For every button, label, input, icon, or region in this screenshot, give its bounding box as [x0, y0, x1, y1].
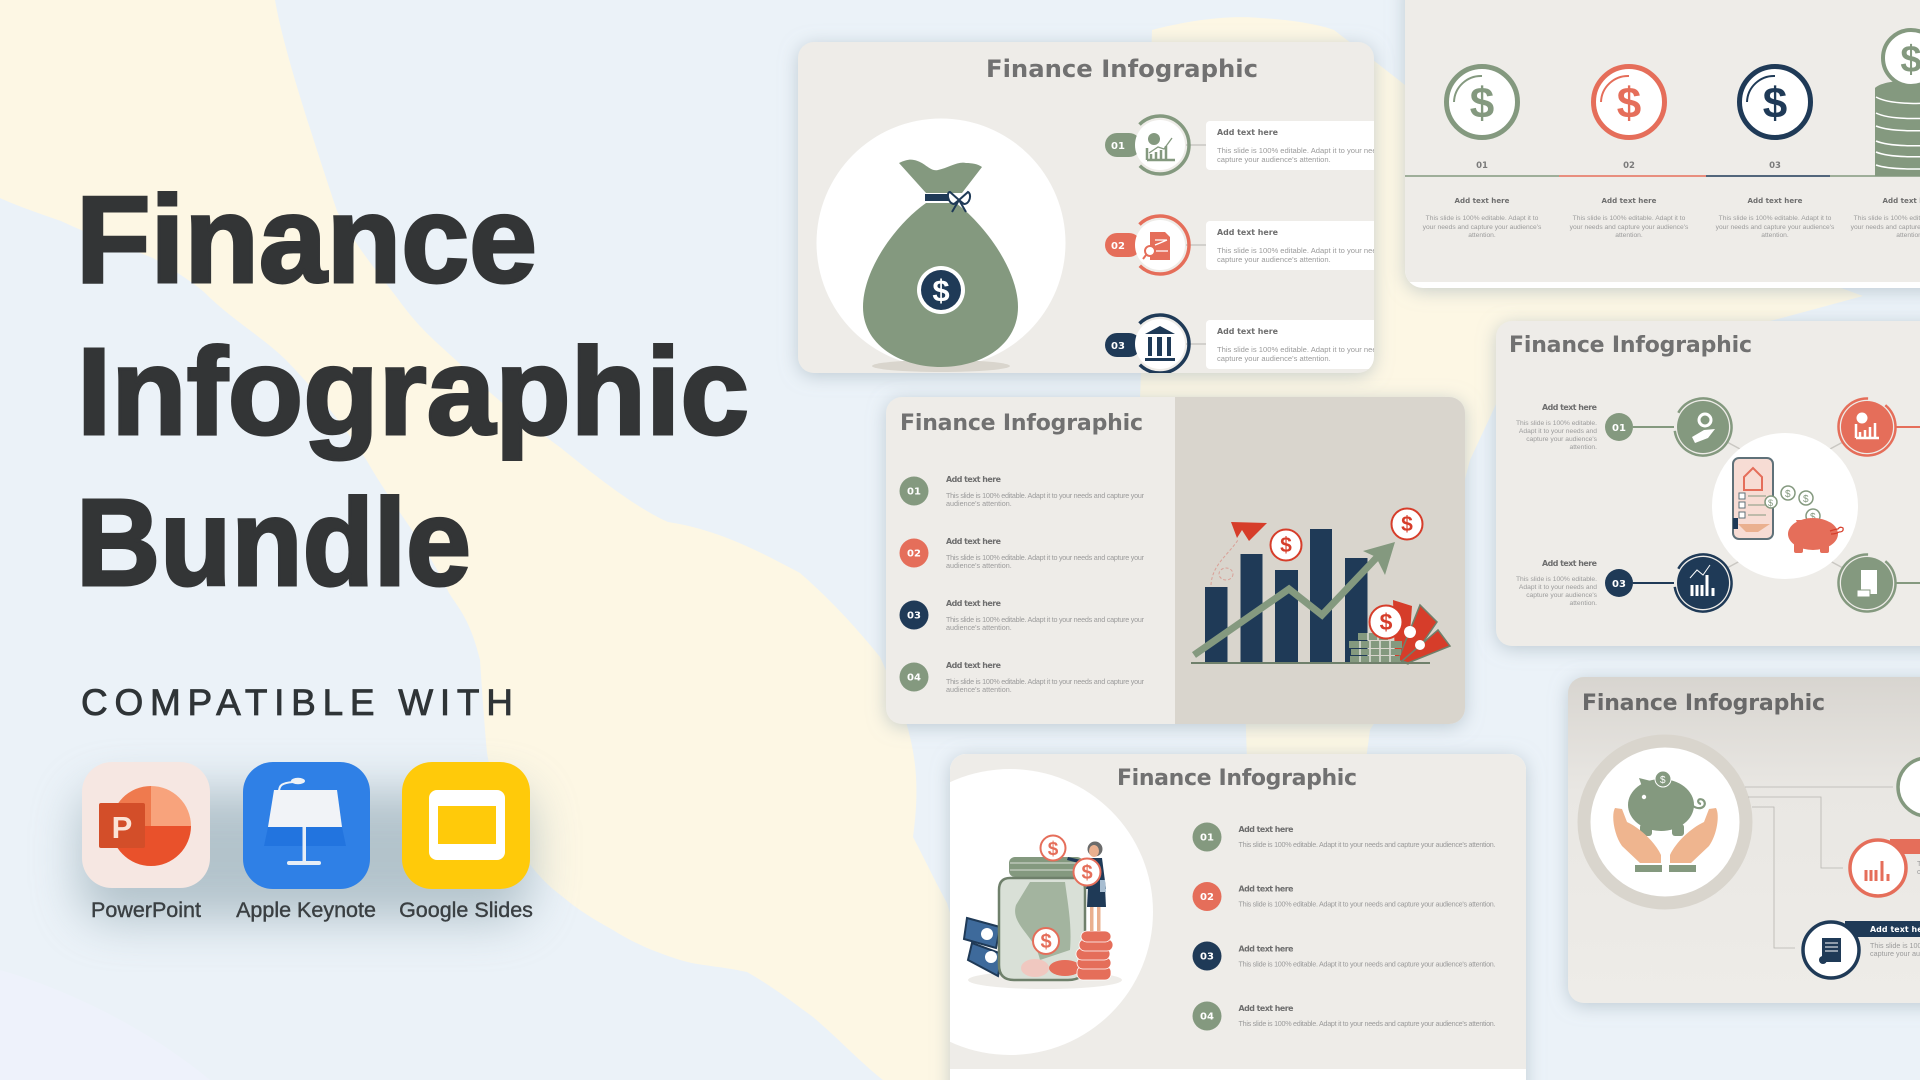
icon: money bag: $	[932, 273, 950, 308]
list item 4	[1192, 1002, 1496, 1030]
icon: piggy bank: $	[1660, 775, 1666, 786]
panel: slide money bag	[798, 42, 1399, 385]
list item 2: audience's attention.	[946, 561, 1012, 570]
title: Bundle	[76, 475, 471, 612]
icon: coin 1	[1270, 530, 1302, 560]
node 3	[1516, 544, 1742, 622]
coin stack	[1875, 30, 1920, 176]
icon: hands	[1613, 808, 1718, 872]
node top	[1898, 758, 1920, 816]
list item 2	[900, 537, 1145, 570]
list item 1	[900, 475, 1145, 508]
row 3	[1105, 313, 1374, 373]
node 3: This slide is 100% editable.	[1516, 576, 1597, 583]
node 1: Add text here	[1542, 403, 1597, 412]
bar chart	[1191, 529, 1430, 664]
list item 1: audience's attention.	[946, 499, 1012, 508]
node middle	[1850, 839, 1920, 896]
list item 1: This slide is 100% editable. Adapt it to your needs and capture your audience's attention.	[1238, 840, 1496, 849]
icon: Google Slides	[402, 762, 530, 889]
list item 2: 02	[907, 548, 921, 560]
node bottom	[1803, 921, 1920, 978]
arrow: growth	[1194, 542, 1395, 655]
icon: coin 2: $	[1401, 513, 1413, 536]
icon: coin 3: $	[1380, 609, 1393, 635]
list item 2: This slide is 100% editable. Adapt it to your needs and capture your	[946, 553, 1145, 562]
panel: slide hub diagram	[1496, 321, 1920, 646]
row 3: Add text here	[1217, 327, 1278, 336]
row 1: Add text here	[1217, 128, 1278, 137]
slide title: Finance Infographic	[1117, 766, 1357, 791]
icon: money bag	[863, 160, 1018, 367]
row 2: 02	[1111, 241, 1125, 252]
coin 1: 01	[1476, 161, 1488, 171]
coin 2: $	[1617, 79, 1641, 128]
panel: slide coins timeline	[1405, 0, 1920, 288]
column 3 text: This slide is 100% editable. Adapt it to	[1719, 215, 1832, 222]
column 1 text: your needs and capture your audience's	[1423, 224, 1542, 231]
label: PowerPoint: PowerPoint	[91, 898, 201, 922]
icon: piggy bank	[1628, 771, 1705, 836]
ring and circle	[1584, 741, 1746, 903]
row 1: This slide is 100% editable. Adapt it to your needs and	[1217, 146, 1399, 155]
row 1: 01	[1111, 141, 1125, 152]
illustration: piggy bank	[1788, 518, 1843, 553]
illustration: coin held: $	[1081, 862, 1093, 884]
column 3 text: your needs and capture your audience's	[1716, 224, 1835, 231]
list item 3: Add text here	[1238, 944, 1294, 953]
illustration: floating coins: $	[1803, 494, 1809, 505]
list item 2: Add text here	[1238, 885, 1294, 894]
slide title: Finance Infographic	[1582, 691, 1825, 716]
illustration: coin over jar	[1040, 836, 1066, 860]
list item 1: Add text here	[1238, 825, 1294, 834]
illustration: jar	[999, 857, 1085, 980]
list item 1: This slide is 100% editable. Adapt it to your needs and capture your	[946, 491, 1145, 500]
illustration: floating coins: $	[1810, 512, 1816, 523]
row 2: This slide is 100% editable. Adapt it to your needs and	[1217, 246, 1399, 255]
list item 3: 03	[1200, 952, 1214, 962]
list item 3	[1192, 942, 1496, 970]
row 1: capture your audience's attention.	[1217, 155, 1331, 164]
column 2 text: Add text here	[1602, 196, 1657, 205]
icon shadow	[80, 790, 530, 920]
icon: coin 1: $	[1280, 534, 1292, 557]
column 4 text	[1851, 196, 1920, 239]
slide title: Finance Infographic	[900, 411, 1143, 436]
title: Infographic	[77, 324, 749, 461]
connectors	[1745, 787, 1893, 948]
node 3: Adapt it to your needs and	[1519, 584, 1597, 591]
icon: PowerPoint: P	[112, 810, 132, 845]
column 2 text	[1570, 196, 1689, 239]
title: Finance	[76, 172, 537, 309]
node 1: 01	[1612, 423, 1626, 434]
bag shadow	[872, 360, 1010, 372]
list item 3: This slide is 100% editable. Adapt it to your needs and capture your audience's attention.	[1238, 959, 1496, 968]
panel: slide piggy hands	[1568, 677, 1920, 1003]
node 3: 03	[1612, 579, 1626, 590]
column 1 text: attention.	[1468, 232, 1496, 239]
list item 4: Add text here	[1238, 1004, 1294, 1013]
list item 1: 01	[907, 486, 921, 498]
coin 3	[1740, 66, 1810, 171]
node 1: attention.	[1569, 444, 1597, 451]
column 3 text	[1716, 196, 1835, 239]
coin 1: $	[1470, 79, 1494, 128]
icon: coin 3	[1370, 606, 1402, 638]
illustration: floating coins: $	[1785, 489, 1791, 500]
background: lavender corner	[0, 970, 210, 1080]
panel: slide savings jar	[867, 754, 1526, 1080]
column 3 text: attention.	[1761, 232, 1789, 239]
coin 2	[1594, 66, 1664, 171]
illustration: coin in jar	[1033, 928, 1059, 954]
white circle	[816, 118, 1066, 368]
column 3 text: Add text here	[1748, 196, 1803, 205]
icon: paper plane	[1211, 522, 1267, 585]
column 2 text: This slide is 100% editable. Adapt it to	[1573, 215, 1686, 222]
coin 2: 02	[1623, 161, 1635, 171]
background: yellow wave	[0, 0, 1000, 1080]
list item 1: Add text here	[946, 475, 1001, 484]
node 1: Adapt it to your needs and	[1519, 428, 1597, 435]
row 3: capture your audience's attention.	[1217, 354, 1331, 363]
node 3: Add text here	[1542, 559, 1597, 568]
column 2 text: attention.	[1615, 232, 1643, 239]
column 1 text	[1423, 196, 1542, 239]
coin 3: 03	[1769, 161, 1781, 171]
slide title: Finance Infographic	[986, 54, 1258, 83]
slide title: Finance Infographic	[1509, 333, 1752, 358]
illustration: coin held	[1074, 858, 1100, 886]
node 2	[1827, 387, 1920, 467]
illustration: coin over jar: $	[1048, 839, 1059, 860]
list item 4: audience's attention.	[946, 685, 1012, 694]
row 3: 03	[1111, 341, 1125, 352]
label: Apple Keynote: Apple Keynote	[236, 898, 376, 922]
list item 3: 03	[907, 610, 921, 622]
node 4	[1827, 543, 1920, 623]
list item 4: This slide is 100% editable. Adapt it to your needs and capture your	[946, 677, 1145, 686]
list item 1: 01	[1200, 832, 1214, 844]
column 1 text: Add text here	[1455, 196, 1510, 205]
icon: banknote stack	[1349, 633, 1402, 662]
illustration: jar shadow	[968, 974, 1122, 989]
list item 2: Add text here	[946, 537, 1001, 546]
list item 3: audience's attention.	[946, 623, 1012, 632]
list item 4: This slide is 100% editable. Adapt it to your needs and capture your audience's attention.	[1238, 1019, 1496, 1028]
title	[76, 172, 749, 612]
list item 1	[1192, 822, 1496, 852]
white circle	[950, 769, 1153, 1055]
row 1	[1105, 114, 1374, 176]
row 3: This slide is 100% editable. Adapt it to your needs and	[1217, 345, 1399, 354]
timeline line	[1405, 175, 1920, 177]
row 2: Add text here	[1217, 228, 1278, 237]
illustration: coin stack	[1076, 931, 1113, 980]
list item 4	[900, 661, 1145, 694]
list item 2: 02	[1200, 892, 1214, 903]
list item 2: This slide is 100% editable. Adapt it to your needs and capture your audience's attention.	[1238, 900, 1496, 909]
node 3: attention.	[1569, 600, 1597, 607]
row 2	[1105, 214, 1374, 276]
node 1: capture your audience's	[1526, 436, 1598, 443]
label: Google Slides: Google Slides	[399, 898, 533, 922]
illustration: floating coins	[1765, 486, 1820, 523]
column 1 text: This slide is 100% editable. Adapt it to	[1426, 215, 1539, 222]
icon: coin 2	[1392, 508, 1422, 540]
icon: PowerPoint	[82, 762, 210, 888]
center circle	[1712, 433, 1858, 579]
illustration: floating coins: $	[1768, 498, 1773, 508]
background: yellow blob right	[1140, 17, 1863, 760]
coin 1	[1446, 66, 1518, 171]
list item 3: This slide is 100% editable. Adapt it to your needs and capture your	[946, 615, 1145, 624]
illustration: banknotes	[964, 918, 1002, 976]
node 3: capture your audience's	[1526, 592, 1598, 599]
illustration: phone	[1733, 458, 1773, 539]
icon: Apple Keynote	[243, 762, 370, 889]
list item 4: Add text here	[946, 661, 1001, 670]
connectors	[1727, 442, 1843, 568]
list item 4: 04	[907, 672, 921, 684]
panel: slide growth chart	[886, 397, 1465, 724]
list item 4: 04	[1200, 1012, 1214, 1022]
coin 3: $	[1763, 79, 1787, 128]
icon: cash fan	[1393, 600, 1450, 664]
heading: compatible with: COMPATIBLE WITH	[81, 682, 513, 723]
list item 3	[900, 599, 1145, 632]
node 1: This slide is 100% editable.	[1516, 420, 1597, 427]
illustration: woman	[1067, 842, 1106, 931]
list item 3: Add text here	[946, 599, 1001, 608]
list item 2	[1192, 882, 1496, 911]
row 2: capture your audience's attention.	[1217, 255, 1331, 264]
column 2 text: your needs and capture your audience's	[1570, 224, 1689, 231]
node 1	[1516, 388, 1742, 466]
illustration: coin in jar: $	[1040, 931, 1052, 953]
